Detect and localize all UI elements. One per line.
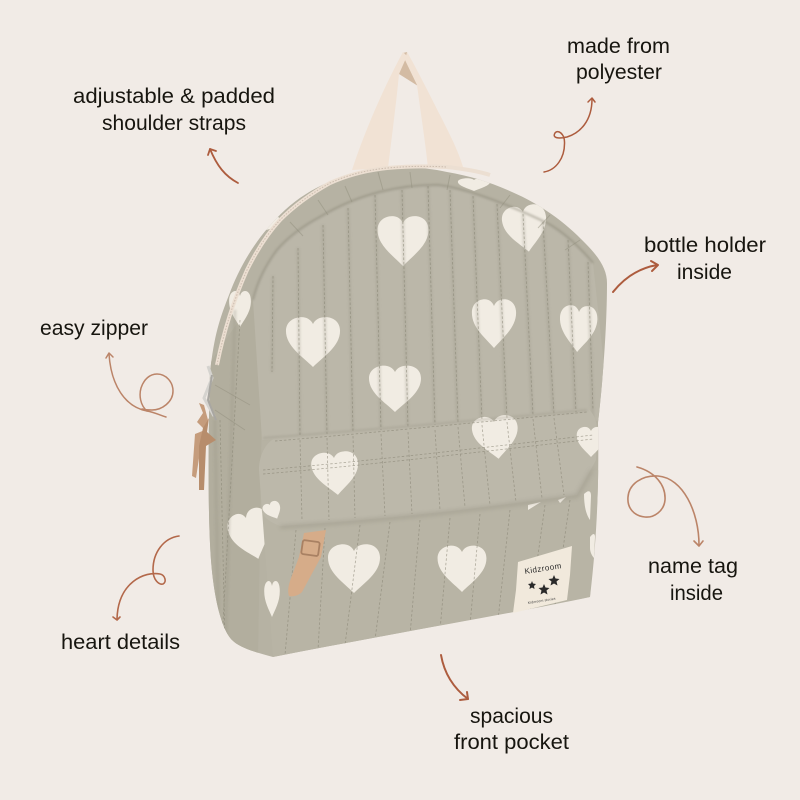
pocket flap: [259, 410, 596, 512]
callout: spacious front pocket: front pocket: [454, 731, 569, 754]
gusset pillow seams: [215, 172, 580, 430]
lower front pocket: [262, 470, 600, 657]
bag body: [205, 166, 610, 660]
hearts on flap: [261, 414, 605, 522]
arrow: front pocket: [441, 655, 468, 700]
front panel: [254, 308, 604, 426]
name label: [513, 546, 572, 613]
arrow: bottle holder: [613, 261, 658, 292]
flap shadow: [280, 470, 592, 527]
callout: easy zipper: easy zipper: [40, 317, 148, 340]
quilting shadows: [228, 188, 594, 536]
arrow: name tag: [628, 467, 703, 546]
callout: name tag inside: inside: [670, 582, 723, 605]
callout: bottle holder inside: inside: [677, 261, 732, 284]
zipper pulls: [192, 366, 216, 490]
arrow: zipper: [106, 353, 173, 417]
arrow: adjustable straps: [208, 149, 238, 183]
side gusset shading: [208, 361, 258, 653]
callout: spacious front pocket: spacious: [470, 705, 553, 728]
callout: bottle holder inside: bottle holder: [644, 234, 766, 257]
name label: Kidzroom: [524, 561, 562, 576]
arrow: polyester: [544, 98, 595, 172]
carry handle: [352, 52, 464, 170]
label stars: [528, 581, 536, 589]
callout: adjustable and padded shoulder straps: shoulder straps: [102, 112, 246, 135]
stitch lines: [220, 186, 593, 655]
callout: heart details: heart details: [61, 631, 180, 654]
name label: Kidzroom stories: [528, 597, 556, 605]
hearts on fabric: [224, 178, 598, 566]
callout: adjustable and padded shoulder straps: [73, 85, 275, 135]
backpack illustration: [192, 52, 610, 660]
arrow: heart details: [113, 536, 179, 620]
callout: name tag inside: name tag: [648, 555, 738, 578]
callout: made from polyester: [567, 35, 670, 84]
panel seam shadow: [253, 185, 593, 300]
callout: bottle holder inside: [644, 234, 766, 284]
zipper tape: [217, 166, 490, 365]
front pocket zip pull: [288, 530, 326, 596]
callout: made from polyester: polyester: [576, 61, 662, 84]
callout: name tag inside: [648, 555, 738, 605]
callout: spacious front pocket: [454, 705, 569, 754]
hearts on lower pocket: [264, 534, 595, 617]
callout: made from polyester: made from: [567, 35, 670, 58]
callout: adjustable and padded shoulder straps: adjustable & padded: [73, 85, 275, 108]
